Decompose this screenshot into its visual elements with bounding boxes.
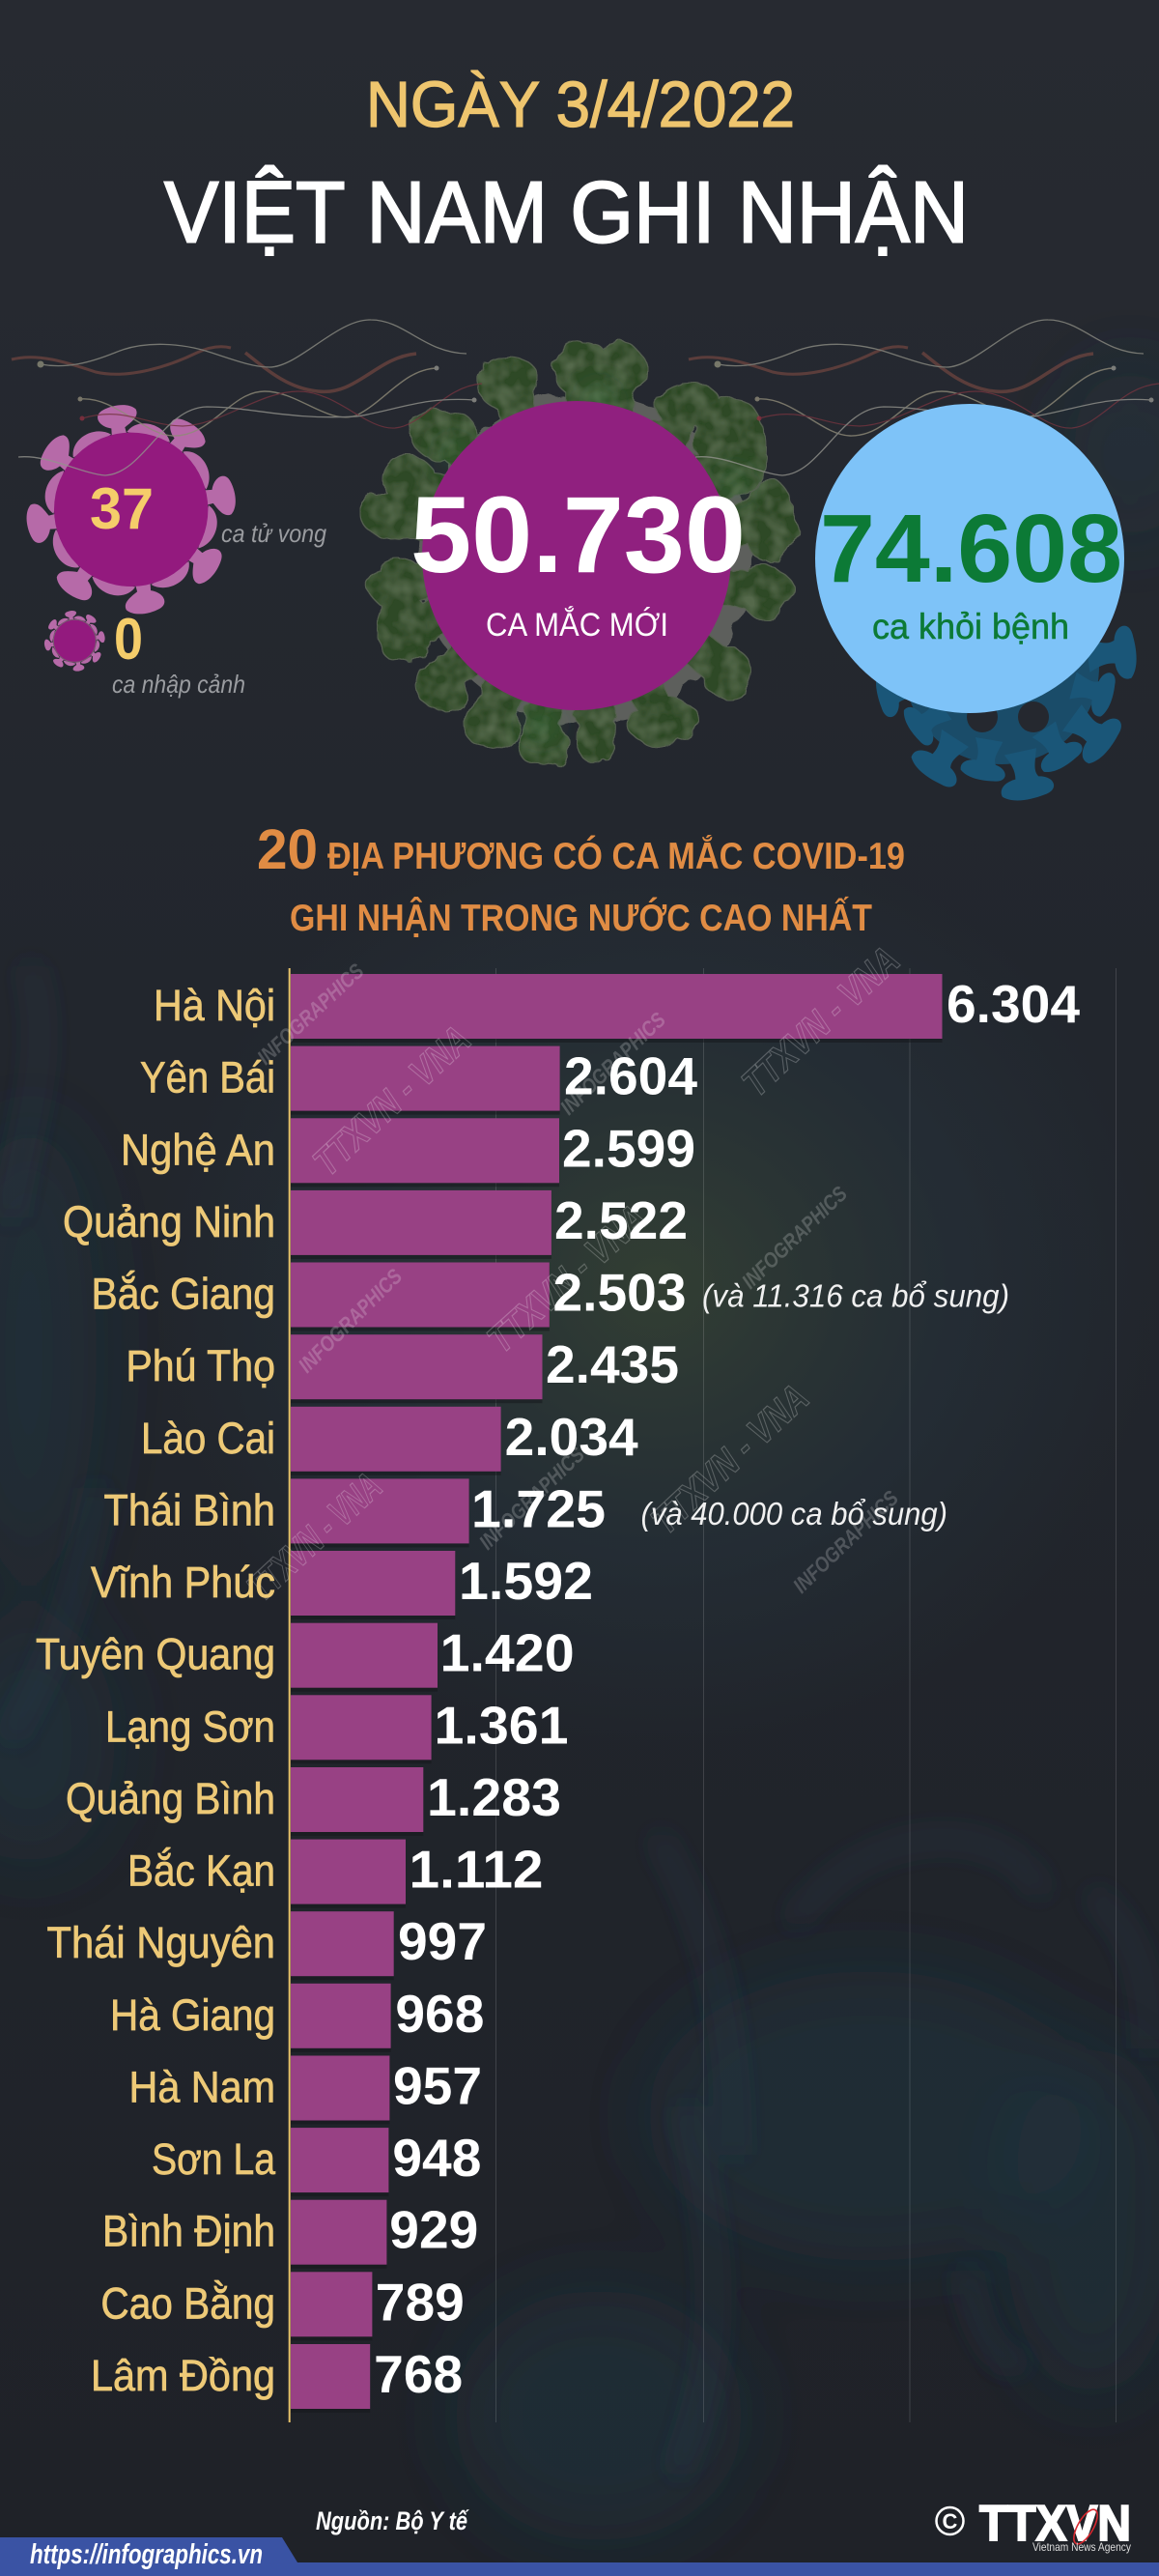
icon: blue coronavirus <box>872 569 1139 805</box>
province labels: Yên Bái <box>140 1053 275 1102</box>
imported number: 0 <box>114 607 143 672</box>
bar values <box>374 974 1080 2404</box>
bar values: 2.604 <box>564 1046 697 1106</box>
province labels: Nghệ An <box>121 1125 275 1174</box>
province labels: Lạng Sơn <box>105 1702 275 1751</box>
chart heading: GHI NHẬN TRONG NƯỚC CAO NHẤT <box>290 897 872 939</box>
bar values: 2.522 <box>554 1190 688 1250</box>
bar: Lạng Sơn <box>291 1695 432 1760</box>
province labels: Lào Cai <box>141 1414 275 1463</box>
province labels: Hà Giang <box>110 1990 275 2040</box>
watermarks: TTXVN - VNA <box>240 1465 390 1610</box>
province labels: Sơn La <box>152 2134 276 2184</box>
province labels: Bắc Giang <box>91 1270 275 1318</box>
footer url: https://infographics.vn <box>30 2539 263 2570</box>
bar values: 789 <box>376 2272 465 2332</box>
bar: Hà Giang <box>291 1984 391 2048</box>
chart heading: 20 <box>257 818 318 881</box>
province labels: Phú Thọ <box>126 1341 275 1390</box>
axis line <box>289 968 291 2422</box>
province labels: Vĩnh Phúc <box>91 1558 275 1607</box>
bar values: 997 <box>398 1911 487 1971</box>
bar values: 1.361 <box>435 1695 568 1755</box>
province labels: Thái Bình <box>104 1485 275 1534</box>
watermarks: INFOGRAPHICS <box>555 1007 670 1120</box>
bar: Thái Nguyên <box>291 1911 394 1976</box>
imported label: ca nhập cảnh <box>112 670 245 699</box>
watermarks <box>240 939 908 1610</box>
bar: Tuyên Quang <box>291 1623 438 1688</box>
bar values: 957 <box>393 2056 482 2116</box>
bar values: 1.725 <box>471 1478 606 1538</box>
bar: Cao Bằng <box>291 2272 372 2336</box>
province labels: Lâm Đồng <box>91 2351 275 2400</box>
bar values: 2.034 <box>505 1407 638 1467</box>
bar values: 948 <box>392 2128 481 2188</box>
bar: Phú Thọ <box>291 1334 543 1399</box>
watermarks: TTXVN - VNA <box>305 1018 479 1185</box>
bar: Bắc Giang <box>291 1262 550 1328</box>
main title: VIỆT NAM GHI NHẬN <box>164 164 969 261</box>
bar: Lâm Đồng <box>291 2344 370 2409</box>
footer bar <box>0 2537 1159 2576</box>
province labels: Bắc Kạn <box>127 1846 275 1896</box>
bar: Sơn La <box>291 2128 388 2192</box>
bar values: 768 <box>374 2344 463 2404</box>
icon: purple virus deaths <box>24 403 238 616</box>
province labels: Hà Nam <box>129 2062 275 2112</box>
bar values: 2.599 <box>562 1118 695 1178</box>
icon: green coronavirus <box>362 342 796 765</box>
bar: Hà Nội <box>291 974 943 1039</box>
bar values: 6.304 <box>947 974 1080 1034</box>
watermarks: TTXVN - VNA <box>643 1377 817 1543</box>
bar chart <box>290 968 1117 2422</box>
note: Thái Bình: (và 40.000 ca bổ sung) <box>641 1496 947 1531</box>
watermarks: INFOGRAPHICS <box>252 959 369 1070</box>
bar: Nghệ An <box>291 1118 559 1183</box>
bar values: 1.112 <box>410 1840 543 1900</box>
bar values: 2.503 <box>552 1262 686 1322</box>
watermarks: TTXVN - VNA <box>480 1197 655 1361</box>
recovered number: 74.608 <box>820 495 1122 603</box>
bar: Quảng Bình <box>291 1767 423 1832</box>
bar: Quảng Ninh <box>291 1190 551 1255</box>
logo: TTXVN: TTXVN <box>979 2496 1131 2552</box>
new cases label: CA MẮC MỚI <box>486 607 668 644</box>
logo: TTXVN: C <box>943 2509 958 2533</box>
bar: Hà Nam <box>291 2056 389 2120</box>
watermarks: INFOGRAPHICS <box>474 1442 589 1555</box>
bar values: 968 <box>395 1984 484 2044</box>
note: Bắc Giang: (và 11.316 ca bổ sung) <box>702 1277 1009 1314</box>
circle: recovered <box>815 404 1124 713</box>
province labels: Cao Bằng <box>100 2278 275 2328</box>
bar values: 1.420 <box>440 1623 575 1683</box>
decorative wave lines left <box>12 320 482 475</box>
bar: Bình Định <box>291 2200 386 2265</box>
chart heading <box>257 818 905 939</box>
deaths number: 37 <box>90 476 154 541</box>
province labels: Bình Định <box>102 2207 275 2256</box>
bar values: 2.435 <box>546 1334 679 1394</box>
province labels <box>36 981 276 2400</box>
source: Nguồn: Bộ Y tế <box>316 2506 469 2535</box>
bar: Lào Cai <box>291 1407 501 1472</box>
circle: new cases <box>422 401 731 710</box>
deaths label: ca tử vong <box>221 519 326 548</box>
bar: Thái Bình <box>291 1478 469 1543</box>
decorative wave lines right <box>689 320 1159 475</box>
watermarks: TTXVN - VNA <box>734 939 908 1105</box>
bar values: 929 <box>389 2200 478 2260</box>
province labels: Tuyên Quang <box>36 1630 275 1679</box>
icon: small purple virus imported <box>43 610 105 672</box>
watermarks: INFOGRAPHICS <box>294 1264 407 1378</box>
province labels: Thái Nguyên <box>46 1918 275 1967</box>
recovered label: ca khỏi bệnh <box>872 607 1069 646</box>
watermarks: INFOGRAPHICS <box>788 1485 903 1598</box>
province labels: Hà Nội <box>154 981 275 1030</box>
chart heading: ĐỊA PHƯƠNG CÓ CA MẮC COVID-19 <box>327 835 905 877</box>
new cases number: 50.730 <box>410 474 746 595</box>
watermarks: INFOGRAPHICS <box>737 1181 852 1294</box>
bar values: 1.592 <box>459 1551 593 1611</box>
title date: NGÀY 3/4/2022 <box>366 69 795 141</box>
province labels: Quảng Bình <box>66 1774 275 1823</box>
province labels: Quảng Ninh <box>63 1197 275 1246</box>
bar: Vĩnh Phúc <box>291 1551 455 1616</box>
bar: Yên Bái <box>291 1046 560 1111</box>
bar values: 1.283 <box>427 1767 561 1827</box>
logo: TTXVN: Vietnam News Agency <box>1032 2540 1131 2554</box>
bar: Bắc Kạn <box>291 1840 406 1904</box>
